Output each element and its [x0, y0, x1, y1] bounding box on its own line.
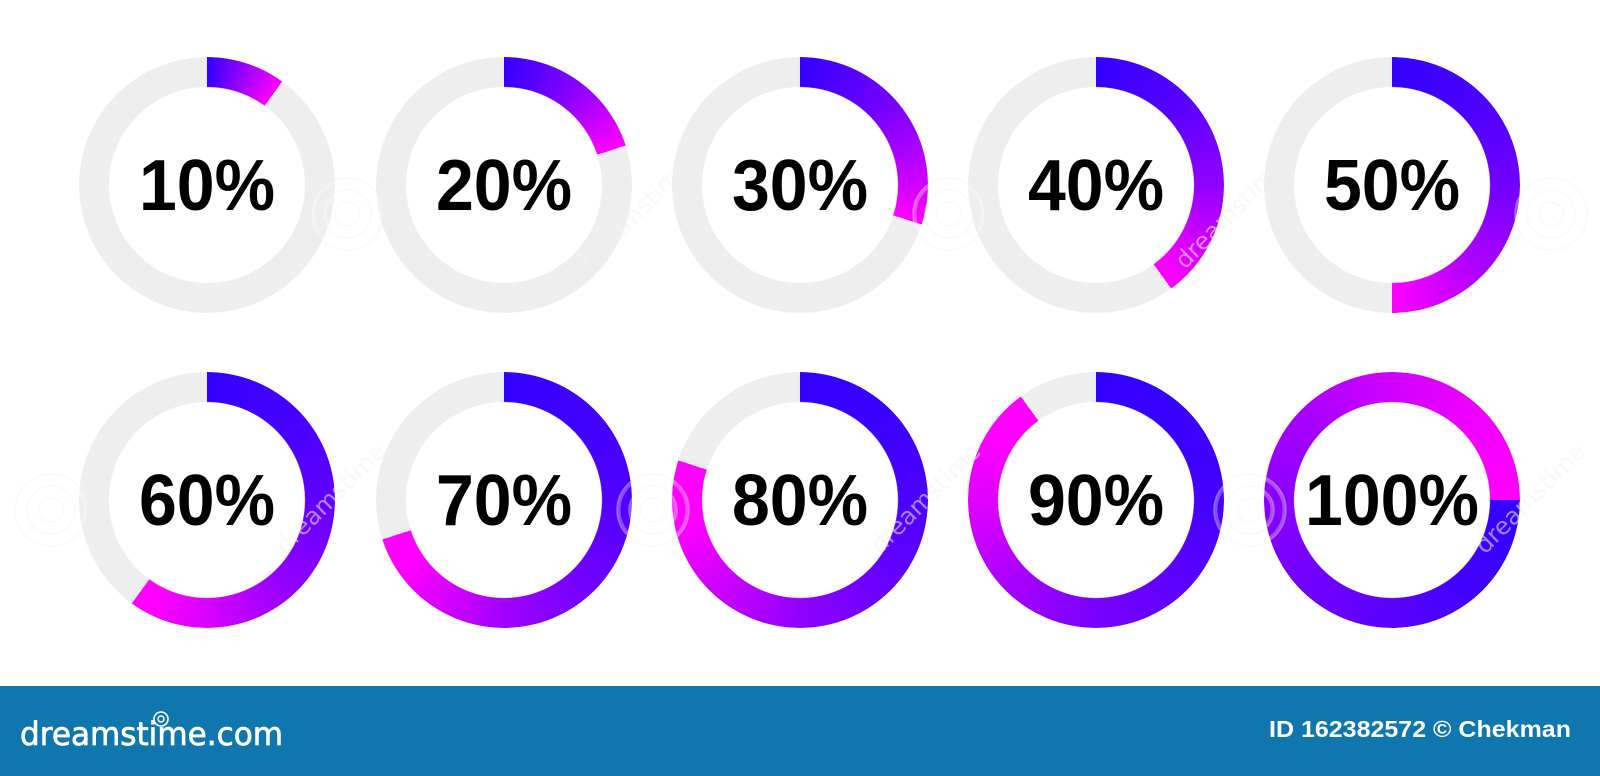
ring chart: 20%: [376, 57, 632, 313]
value: 80%: 80%: [732, 460, 868, 541]
value: 50%: 50%: [1324, 145, 1460, 226]
value: 10%: 10%: [139, 145, 275, 226]
ring chart: 30%: [672, 57, 928, 313]
value: 30%: 30%: [732, 145, 868, 226]
watermark overlay: dreamstime: [1169, 153, 1291, 274]
watermark overlay: dreamstime: [864, 438, 986, 559]
track: 80%: [678, 372, 800, 470]
track: 40%: [968, 57, 1171, 313]
arc: 10%: [207, 57, 282, 106]
arc: 70%: [376, 372, 632, 628]
arc: 40%: [1096, 57, 1224, 288]
track: 90%: [1021, 372, 1096, 420]
value: 60%: 60%: [139, 460, 275, 541]
track: 30%: [672, 57, 928, 313]
watermark overlay: dreamstime: [269, 438, 391, 559]
track: 20%: [376, 57, 632, 313]
track: 60%: [79, 372, 207, 604]
arc: 100%: [1264, 372, 1520, 628]
ring chart: 100%: [1264, 372, 1520, 628]
track: 10%: [79, 57, 335, 313]
arc: 50%: [1392, 57, 1520, 313]
ring chart: 80%: [672, 372, 928, 628]
value: 70%: 70%: [436, 460, 572, 541]
ring chart: 50%: [1264, 57, 1520, 313]
watermark overlay: dreamstime: [574, 153, 696, 274]
footer credit: ID 162382572 © Chekman: [1269, 716, 1571, 742]
ring chart: 70%: [376, 372, 632, 628]
value: 20%: 20%: [436, 145, 572, 226]
arc: 90%: [968, 372, 1224, 628]
arc: 60%: [132, 372, 335, 628]
watermark overlay: dreamstime: [1469, 438, 1591, 559]
ring chart: 10%: [79, 57, 335, 313]
arc: 80%: [672, 372, 928, 628]
footer bar: [0, 686, 1600, 776]
ring chart: 90%: [968, 372, 1224, 628]
arc: 20%: [504, 57, 626, 154]
track: 50%: [1264, 57, 1392, 313]
value: 90%: 90%: [1028, 460, 1164, 541]
value: 100%: 100%: [1305, 460, 1479, 541]
footer logo: dreamstime.com: [20, 715, 283, 753]
ring chart: 60%: [79, 372, 335, 628]
track: 70%: [376, 372, 504, 540]
value: 40%: 40%: [1028, 145, 1164, 226]
ring chart: 40%: [968, 57, 1224, 313]
arc: 30%: [800, 57, 928, 224]
track: 100%: [1264, 372, 1520, 628]
